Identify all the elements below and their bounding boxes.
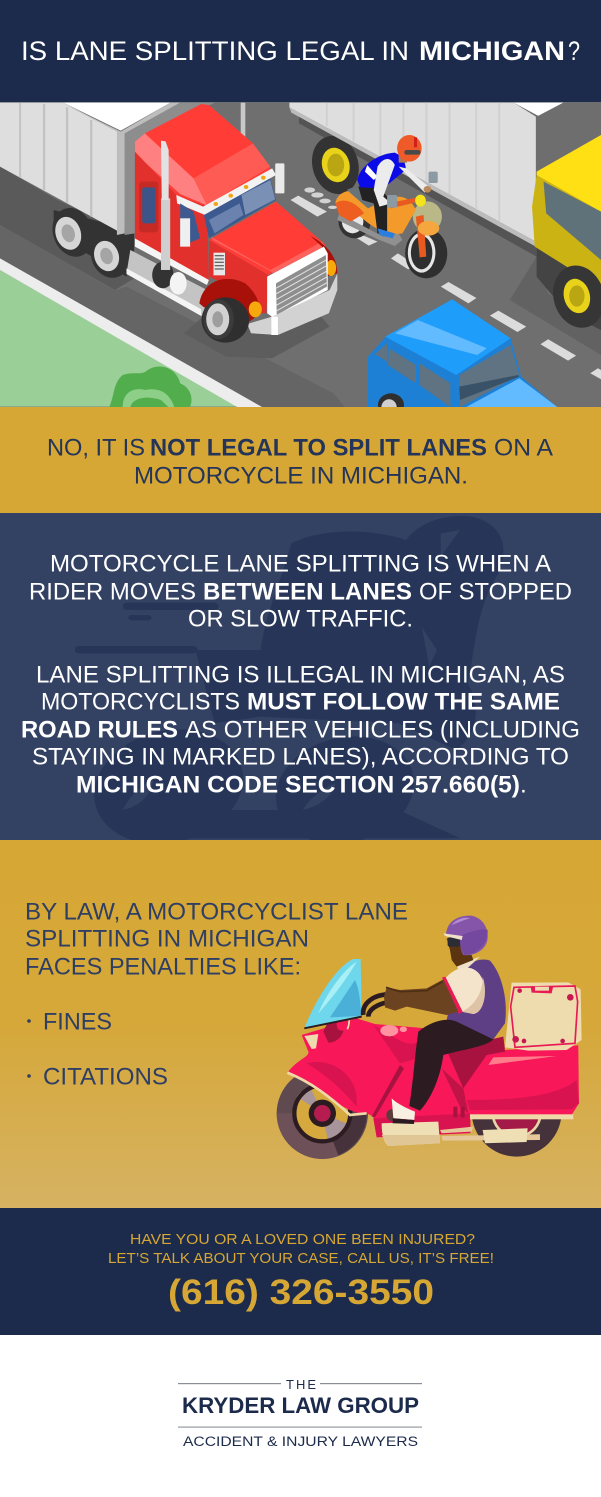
floor trim bbox=[470, 1114, 573, 1119]
paragraph: Michigan law: LANE SPLITTING IS ILLEGAL IN MICHIGAN, AS bbox=[36, 662, 565, 688]
left trailer bbox=[0, 103, 215, 281]
title: ? bbox=[568, 36, 580, 66]
answer text: MOTORCYCLE IN MICHIGAN. bbox=[134, 462, 468, 490]
paragraph: Michigan law: . bbox=[520, 772, 527, 798]
call to action text: HAVE YOU OR A LOVED ONE BEEN INJURED? bbox=[130, 1231, 475, 1248]
paragraph: Michigan law: MICHIGAN CODE SECTION 257.660(5) bbox=[76, 772, 520, 798]
rear wheel bbox=[472, 1067, 562, 1157]
header banner bbox=[0, 0, 601, 102]
logo: The Kryder Law Group bbox=[178, 1377, 422, 1449]
answer text: NOT LEGAL TO SPLIT LANES bbox=[150, 434, 487, 462]
logo: The Kryder Law Group: ACCIDENT & INJURY LAWYERS bbox=[183, 1434, 418, 1449]
paragraph: definition: RIDER MOVES bbox=[29, 578, 196, 606]
exhausts bbox=[382, 1122, 540, 1146]
illustration: traffic scene with motorcycle splitting lanes bbox=[0, 100, 601, 417]
rider bbox=[384, 916, 506, 1124]
paragraph: definition: BETWEEN LANES bbox=[203, 578, 412, 606]
illustration: rider on red touring motorcycle bbox=[277, 916, 582, 1159]
tree bbox=[109, 367, 192, 407]
windshield bbox=[304, 959, 362, 1028]
paragraph: Michigan law: MOTORCYCLISTS bbox=[41, 688, 240, 716]
phone number: (616) 326-3550 bbox=[168, 1273, 434, 1312]
grass and curb bbox=[0, 258, 263, 407]
call to action banner bbox=[0, 1208, 601, 1335]
answer banner bbox=[0, 407, 601, 513]
answer text: NO, IT IS bbox=[47, 434, 145, 462]
answer text bbox=[47, 434, 554, 490]
title bbox=[21, 36, 580, 66]
top box bbox=[505, 982, 582, 1051]
yellow truck bbox=[532, 135, 601, 331]
penalties list: FINES bbox=[43, 1008, 112, 1036]
paragraph: Michigan law bbox=[21, 662, 580, 798]
right trailer bbox=[240, 102, 564, 256]
panel: definition of lane splitting bbox=[0, 513, 601, 865]
background motorcycle silhouette bbox=[72, 516, 503, 865]
answer text: ON A bbox=[494, 434, 554, 462]
logo: The Kryder Law Group: KRYDER LAW GROUP bbox=[182, 1393, 419, 1418]
penalties intro text: FACES PENALTIES LIKE: bbox=[25, 954, 301, 980]
penalties list bbox=[27, 1008, 168, 1090]
paragraph: Michigan law: STAYING IN MARKED LANES), ACCORDING TO bbox=[32, 744, 569, 770]
fairing headlight and mirror bbox=[304, 1009, 407, 1049]
title: MICHIGAN bbox=[419, 36, 565, 66]
penalties list: CITATIONS bbox=[43, 1064, 168, 1090]
paragraph: Michigan law: MUST FOLLOW THE SAME bbox=[247, 688, 560, 716]
logo: The Kryder Law Group: THE bbox=[286, 1377, 316, 1392]
handlebar bbox=[363, 994, 392, 1017]
paragraph: Michigan law: ROAD RULES bbox=[21, 716, 178, 744]
penalties intro text bbox=[25, 898, 408, 980]
paragraph: definition: OF STOPPED bbox=[419, 578, 572, 606]
panel: penalties bbox=[0, 840, 601, 1208]
lane markings bbox=[291, 196, 601, 379]
penalties intro text: BY LAW, A MOTORCYCLIST LANE bbox=[25, 898, 408, 926]
paragraph: Michigan law: AS OTHER VEHICLES (INCLUDING bbox=[185, 716, 580, 744]
front wheel bbox=[277, 1068, 368, 1159]
paragraph: definition: OR SLOW TRAFFIC. bbox=[188, 606, 413, 632]
title: IS LANE SPLITTING LEGAL IN bbox=[21, 36, 409, 66]
paragraph: definition bbox=[29, 550, 572, 632]
call to action text: LET’S TALK ABOUT YOUR CASE, CALL US, IT’S FREE! bbox=[108, 1250, 494, 1267]
blue car bbox=[368, 299, 558, 417]
paragraph: definition: MOTORCYCLE LANE SPLITTING IS WHEN A bbox=[50, 550, 552, 578]
call to action text bbox=[108, 1231, 494, 1267]
penalties intro text: SPLITTING IN MICHIGAN bbox=[25, 926, 309, 952]
motorcycle and rider bbox=[304, 135, 447, 278]
bike body bbox=[288, 1018, 579, 1137]
red semi truck bbox=[126, 104, 337, 343]
front fender trim bbox=[287, 1073, 367, 1115]
